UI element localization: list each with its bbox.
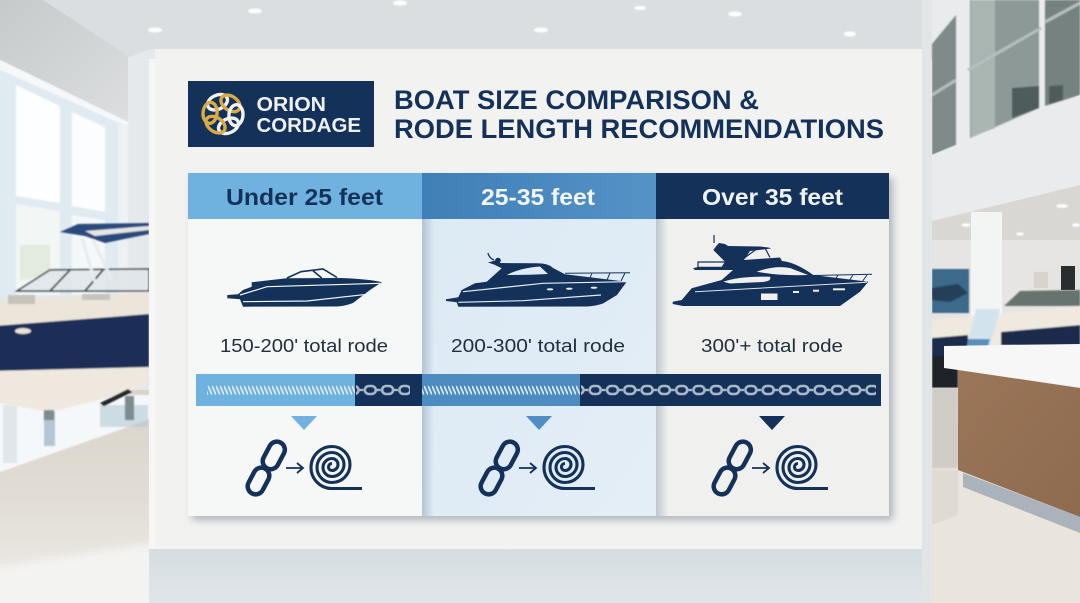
column heading: Over 35 feet	[702, 184, 843, 210]
icon: chain to coil, column 2	[478, 439, 595, 497]
logo wordmark: ORION	[256, 93, 326, 116]
stand under panel	[149, 549, 932, 603]
boat photo left	[0, 223, 149, 420]
icon: knot emblem	[202, 91, 244, 137]
title: RODE LENGTH RECOMMENDATIONS	[394, 114, 884, 144]
column: 25-35 feet	[422, 173, 656, 516]
right wall	[932, 0, 1080, 603]
table shadow	[192, 178, 893, 520]
display panel	[149, 49, 932, 603]
ceiling	[43, 0, 922, 57]
title: BOAT SIZE COMPARISON &	[394, 85, 759, 115]
floor left	[0, 390, 150, 603]
logo	[188, 81, 374, 147]
upper windows	[932, 0, 1080, 155]
wall picture	[932, 269, 969, 313]
rope section 1	[207, 386, 355, 395]
floor right	[932, 388, 1080, 603]
rode label: 300'+ total rode	[701, 335, 843, 356]
window wall left	[0, 28, 162, 300]
icon: cruiser boat	[446, 253, 630, 307]
column: over 35 feet	[656, 173, 889, 516]
pillar	[971, 212, 1002, 324]
rode label: 150-200' total rode	[220, 335, 388, 356]
wall below windows	[932, 95, 1080, 221]
column heading: Under 25 feet	[226, 184, 383, 210]
rode label: 200-300' total rode	[451, 335, 625, 356]
rope section 2	[422, 386, 580, 395]
chain section 1	[356, 384, 410, 396]
title	[394, 85, 884, 144]
rope and chain bar	[196, 374, 881, 406]
showroom boat right	[932, 290, 1080, 388]
column: under 25 feet	[188, 173, 422, 516]
triangle marker	[526, 416, 552, 430]
icon: runabout boat	[227, 269, 382, 307]
column heading: 25-35 feet	[481, 184, 595, 210]
triangle marker	[291, 416, 317, 430]
logo wordmark second line: CORDAGE	[256, 114, 361, 137]
icon: chain to coil, column 3	[711, 439, 828, 497]
ceiling lights	[248, 0, 856, 36]
chain section 2	[581, 384, 876, 396]
icon: chain to coil, column 1	[245, 439, 362, 497]
triangle marker	[759, 416, 785, 430]
reception desk	[944, 344, 1080, 387]
icon: flybridge yacht	[673, 235, 872, 306]
wall above windows	[0, 0, 130, 122]
recessed ceiling	[932, 185, 1080, 240]
